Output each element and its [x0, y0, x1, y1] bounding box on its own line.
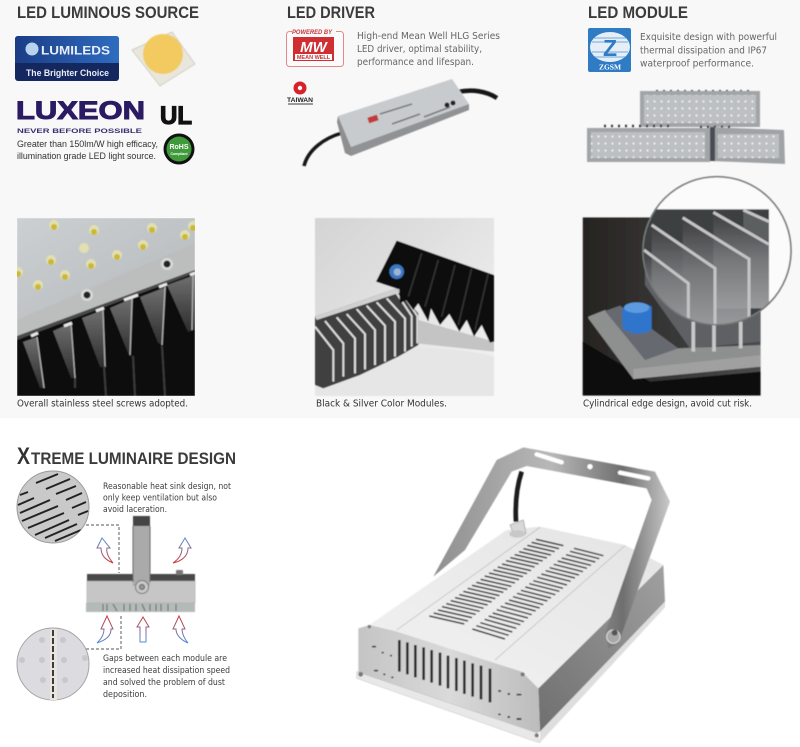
image: LED modules	[587, 91, 785, 164]
black heat sink	[376, 241, 494, 343]
photo: stainless steel screws	[13, 218, 198, 396]
heading: LED module: LED MODULE	[588, 3, 688, 22]
logo: ZGSM: Z	[603, 35, 617, 61]
heading: LED luminous source: LED LUMINOUS SOURCE	[17, 3, 199, 22]
logo: Luxeon: NEVER BEFORE POSSIBLE	[17, 128, 143, 135]
logo: ZGSM	[588, 28, 631, 72]
text: module description: Exquisite design with powerful	[640, 32, 777, 43]
front vents	[399, 640, 490, 702]
corner screws	[358, 625, 539, 737]
cable gland	[509, 520, 526, 538]
logo: Mean Well	[286, 27, 344, 66]
top background panel	[0, 0, 800, 418]
caption: screws: Overall stainless steel screws adopted.	[17, 398, 188, 410]
photo: black and silver modules	[315, 218, 494, 396]
connector: bottom dashed line	[86, 615, 121, 649]
text: module description: waterproof performance.	[640, 58, 754, 70]
icon: RoHS badge: Compliant	[170, 152, 188, 156]
bracket hole	[587, 464, 593, 469]
connector: top dashed line	[86, 525, 119, 573]
text: module gap note: Gaps between each module are	[103, 654, 227, 664]
text: source description	[17, 139, 158, 162]
caption: edge design: Cylindrical edge design, avoid cut risk.	[583, 398, 752, 410]
icon: UL mark: UL	[160, 102, 192, 130]
magnifier circle	[643, 177, 791, 328]
caption: modules: Black & Silver Color Modules.	[316, 398, 447, 410]
icon: RoHS badge	[164, 134, 194, 164]
text: heat sink note: avoid laceration.	[103, 505, 167, 515]
front face	[358, 625, 540, 734]
blue connector	[389, 264, 404, 279]
text: module gap note	[103, 654, 230, 700]
heading: Xtreme luminaire design: X	[17, 443, 30, 470]
front small holes	[372, 647, 521, 719]
callout circle: heat sink detail	[17, 471, 89, 543]
arrow: lower right airflow	[173, 616, 188, 643]
logo: Taiwan: TAIWAN	[287, 97, 313, 104]
heading: Xtreme luminaire design	[17, 443, 236, 470]
text: driver description	[357, 31, 500, 68]
logo: Lumileds: The Brighter Choice	[26, 68, 109, 79]
text: module description: thermal dissipation and IP67	[640, 46, 767, 56]
photo: cylindrical edge design	[583, 177, 791, 396]
logo: Lumileds: LUMILEDS	[41, 44, 110, 58]
logo: ZGSM: ZGSM	[599, 62, 621, 72]
image: luminaire	[357, 447, 670, 743]
logo: Luxeon: LUXEON	[16, 97, 145, 125]
icon: RoHS badge: RoHS	[169, 144, 189, 151]
arrow: upper left airflow	[97, 538, 113, 563]
text: driver description: performance and lifespan.	[357, 57, 474, 68]
logo: Mean Well: POWERED BY	[292, 30, 333, 36]
text: module gap note: and solved the problem of dust	[103, 678, 226, 688]
blue cap	[622, 302, 652, 334]
logo: Lumileds	[15, 36, 119, 81]
arrow: lower left airflow	[97, 616, 113, 643]
text: heat sink note	[103, 482, 232, 515]
text: heat sink note: only keep ventilation but also	[103, 494, 217, 504]
panel: LED luminous source	[15, 3, 199, 164]
housing top	[369, 527, 663, 688]
icon: LED chip	[132, 32, 195, 86]
bracket slots	[537, 454, 648, 478]
heading: LED driver: LED DRIVER	[287, 3, 375, 22]
side lip	[540, 602, 665, 743]
top vents, left row	[429, 539, 563, 624]
panel seams	[397, 527, 625, 660]
front lip	[357, 672, 540, 743]
screws	[81, 258, 173, 301]
logo: Mean Well: MEAN WELL	[297, 55, 331, 61]
housing side	[538, 565, 665, 732]
panel: LED driver	[286, 3, 500, 166]
top vents, right row	[472, 548, 603, 639]
text: driver description: High-end Mean Well HLG Series	[357, 31, 500, 42]
bracket	[433, 447, 670, 648]
callout circle: module gap detail	[17, 628, 89, 700]
cable	[516, 472, 522, 522]
arrow: center airflow	[137, 617, 149, 642]
pivot bolt	[607, 630, 620, 643]
diagram: module cross-section	[86, 516, 195, 612]
silver heat sink	[315, 288, 418, 388]
text: source description: Greater than 150lm/W high efficacy,	[17, 139, 158, 150]
logo: Taiwan	[287, 82, 313, 105]
image: LED driver unit	[304, 79, 497, 166]
panel: LED module	[587, 3, 785, 164]
heading: Xtreme luminaire design: TREME LUMINAIRE DESIGN	[31, 449, 236, 468]
arrow: upper right airflow	[173, 538, 191, 563]
text: module gap note: deposition.	[103, 690, 147, 700]
text: module gap note: increased heat dissipation speed	[103, 666, 230, 676]
text: module description	[640, 32, 777, 70]
logo: Luxeon	[16, 97, 145, 135]
text: heat sink note: Reasonable heat sink design, not	[103, 482, 232, 492]
text: source description: illumination grade LED light source.	[17, 151, 156, 162]
logo: Mean Well: MW	[300, 39, 329, 56]
text: driver description: LED driver, optimal stability,	[357, 44, 482, 55]
